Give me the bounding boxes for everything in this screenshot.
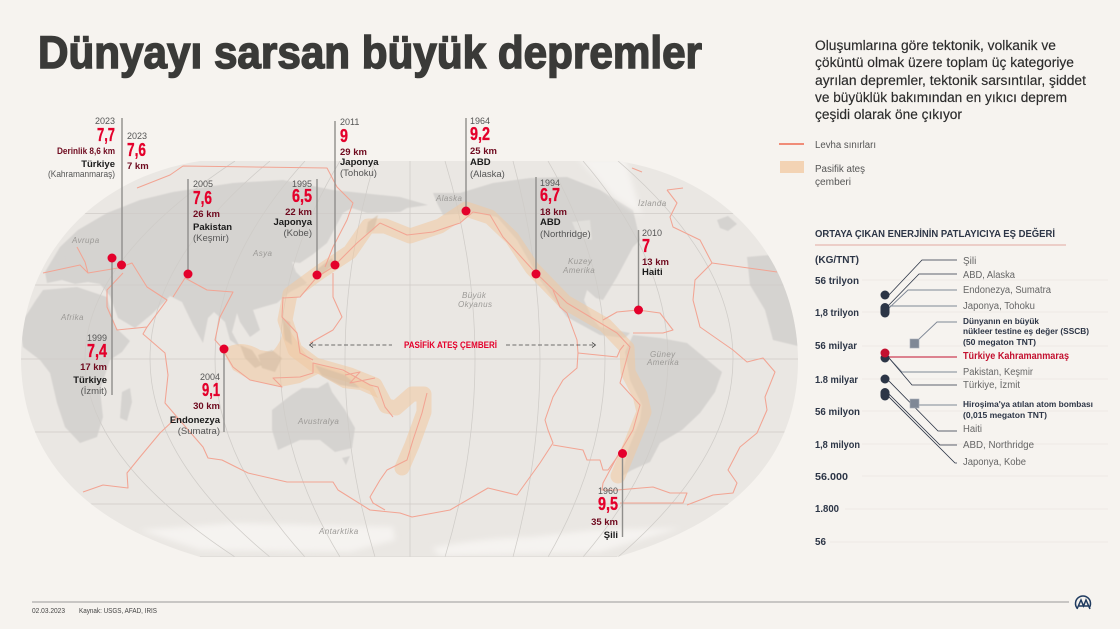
event: Şili: 35 km <box>591 517 618 528</box>
chart labels: Haiti <box>963 424 982 435</box>
event: Türkiye İzmit: (İzmit) <box>81 386 107 397</box>
event: Endonezya Sumatra: 9,1 <box>202 379 220 400</box>
event: ABD Alaska: (Alaska) <box>470 169 505 180</box>
intro text: çöküntü olmak üzere toplam üç kategoriye <box>815 55 1074 70</box>
map labels: Büyük <box>462 291 487 300</box>
chart labels: nükleer testine eş değer (SSCB) <box>963 326 1089 336</box>
legend: çemberi <box>815 177 851 188</box>
event: Şili: 9,5 <box>598 493 618 514</box>
comparison squares <box>910 339 919 408</box>
event: ABD Northridge: 1994 <box>540 178 560 188</box>
ice: Hudson Bay, Greenland and Antarctica <box>140 158 680 556</box>
ring of fire label and arrows <box>310 340 596 350</box>
axis labels: 56.000 <box>815 471 848 483</box>
axis labels: 1,8 trilyon <box>815 307 859 319</box>
map labels: Asya <box>252 249 273 258</box>
legend <box>779 140 876 188</box>
map labels: Avustralya <box>297 417 339 426</box>
axis labels: 1,8 milyon <box>815 439 860 451</box>
icon: agency logo <box>1076 596 1090 609</box>
Pacific Ring of Fire band <box>222 209 644 476</box>
event: Japonya Kobe: 22 km <box>285 207 312 218</box>
event: Türkiye 7,6: 7,6 <box>127 139 146 160</box>
event: Türkiye 7,6 <box>127 131 149 172</box>
footer: Kaynak: USGS, AFAD, IRIS <box>79 608 157 615</box>
chart labels <box>963 256 1093 468</box>
event: Türkiye Kahramanmaraş 7,7: Türkiye <box>81 159 115 170</box>
intro text: çeşidi olarak öne çıkıyor <box>815 107 962 122</box>
event: Şili <box>591 449 627 541</box>
chart labels: Şili <box>963 256 976 267</box>
event: ABD Alaska: 9,2 <box>470 123 490 144</box>
event: Endonezya Sumatra: 2004 <box>200 372 220 382</box>
event: Pakistan Keşmir: (Keşmir) <box>193 233 229 244</box>
axis labels <box>815 254 860 548</box>
event: ABD Alaska: ABD <box>470 157 491 168</box>
event: Haiti <box>634 228 669 314</box>
event: Türkiye İzmit: 7,4 <box>87 340 108 361</box>
event: Haiti: Haiti <box>642 267 663 278</box>
event: Japonya Kobe: Japonya <box>273 217 313 228</box>
title: Dünyayı sarsan büyük depremler <box>38 27 702 78</box>
axis labels: 1.8 milyar <box>815 374 858 386</box>
intro text <box>815 38 1086 122</box>
chart labels: Endonezya, Sumatra <box>963 285 1051 296</box>
event: Japonya Tohoku: (Tohoku) <box>340 168 377 179</box>
intro text: Oluşumlarına göre tektonik, volkanik ve <box>815 38 1056 53</box>
chart labels: Dünyanın en büyük <box>963 316 1039 326</box>
event: Endonezya Sumatra <box>170 344 228 437</box>
event: Türkiye 7,6: 7 km <box>127 161 149 172</box>
event: Pakistan Keşmir: 26 km <box>193 209 220 220</box>
event: Japonya Tohoku: 2011 <box>340 117 359 127</box>
axis labels: (KG/TNT) <box>815 254 859 266</box>
event: ABD Northridge: (Northridge) <box>540 229 591 240</box>
event: Pakistan Keşmir: 2005 <box>193 179 213 189</box>
event: Türkiye Kahramanmaraş 7,7: 7,7 <box>97 124 115 145</box>
event: Pakistan Keşmir: 7,6 <box>193 187 212 208</box>
event: Türkiye Kahramanmaraş 7,7: Derinlik 8,6 km <box>57 146 115 157</box>
event: Endonezya Sumatra: 30 km <box>193 401 220 412</box>
map labels: İzlanda <box>638 199 667 208</box>
chart labels: (50 megaton TNT) <box>963 337 1036 347</box>
chart labels: Hiroşima'ya atılan atom bombası <box>963 399 1093 409</box>
event: ABD Northridge: 18 km <box>540 207 567 218</box>
event: Haiti: 2010 <box>642 228 662 238</box>
axis labels: 1.800 <box>815 503 839 515</box>
map labels: Antarktika <box>318 527 359 536</box>
legend: Levha sınırları <box>815 140 876 151</box>
continents <box>20 177 802 476</box>
leader lines <box>888 260 957 463</box>
intro text: ve büyüklük bakımından en yıkıcı deprem <box>815 90 1067 105</box>
axis labels: 56 milyar <box>815 340 857 352</box>
event: Türkiye İzmit: Türkiye <box>73 375 107 386</box>
event: Japonya Kobe: 1995 <box>292 179 312 189</box>
map labels: Alaska <box>435 194 463 203</box>
event: Türkiye Kahramanmaraş 7,7 <box>48 116 126 270</box>
event: Japonya Kobe: 6,5 <box>292 185 312 206</box>
map labels: Okyanus <box>458 300 492 309</box>
event: Japonya Tohoku <box>330 117 379 270</box>
map labels: Avrupa <box>71 236 100 245</box>
footer: 02.03.2023 <box>32 608 65 615</box>
chart labels: ABD, Alaska <box>963 270 1015 281</box>
event: Japonya Kobe <box>273 179 322 280</box>
map labels <box>60 194 679 536</box>
event: Türkiye İzmit <box>73 254 116 397</box>
event: Japonya Tohoku: 9 <box>340 125 348 146</box>
energy chart <box>815 227 1108 548</box>
map labels: Güney <box>650 350 676 359</box>
event: Türkiye İzmit: 17 km <box>80 362 107 373</box>
chart heading: ORTAYA ÇIKAN ENERJİNİN PATLAYICIYA EŞ DEĞERİ <box>815 227 1055 240</box>
earthquake markers <box>880 290 890 400</box>
event: Türkiye Kahramanmaraş 7,7: 2023 <box>95 116 115 126</box>
event: Haiti: 7 <box>642 235 650 256</box>
map labels: Afrika <box>60 313 84 322</box>
legend: Pasifik ateş <box>815 164 865 175</box>
event: Türkiye 7,6: 2023 <box>127 131 147 141</box>
intro text: ayrılan depremler, tektonik sarsıntılar, şiddet <box>815 73 1086 88</box>
chart labels: Japonya, Kobe <box>963 457 1026 468</box>
chart labels: Pakistan, Keşmir <box>963 367 1034 378</box>
graticule <box>0 161 820 557</box>
event: Şili: 1960 <box>598 486 618 496</box>
chart labels: Türkiye Kahramanmaraş <box>963 351 1069 362</box>
event: Japonya Kobe: (Kobe) <box>283 228 312 239</box>
event: Haiti: 13 km <box>642 257 669 268</box>
plate boundaries <box>43 166 777 517</box>
event: Şili: Şili <box>604 530 618 541</box>
map labels: Kuzey <box>568 257 593 266</box>
event: Türkiye İzmit: 1999 <box>87 333 107 343</box>
chart labels: Türkiye, İzmit <box>963 378 1020 391</box>
event: Endonezya Sumatra: (Sumatra) <box>178 426 220 437</box>
footer <box>32 602 1069 615</box>
ring of fire label and arrows: PASİFİK ATEŞ ÇEMBERİ <box>404 340 497 350</box>
event: ABD Northridge: 6,7 <box>540 184 560 205</box>
map labels: Amerika <box>646 358 679 367</box>
event: ABD Alaska: 25 km <box>470 146 497 157</box>
chart labels: (0,015 megaton TNT) <box>963 410 1047 420</box>
event: Pakistan Keşmir: Pakistan <box>193 222 232 233</box>
chart labels: Japonya, Tohoku <box>963 301 1035 312</box>
axis labels: 56 milyon <box>815 406 860 418</box>
islands in the ring <box>240 215 378 388</box>
event: ABD Alaska: 1964 <box>470 116 490 126</box>
axis labels: 56 <box>815 536 826 548</box>
chart labels: ABD, Northridge <box>963 440 1034 451</box>
axis labels: 56 trilyon <box>815 275 859 287</box>
world map <box>21 161 798 557</box>
map labels: Amerika <box>562 266 595 275</box>
event: Pakistan Keşmir <box>184 179 232 278</box>
event: Japonya Tohoku: Japonya <box>340 157 379 168</box>
event: ABD Alaska <box>462 116 505 216</box>
event: Japonya Tohoku: 29 km <box>340 147 367 158</box>
event: ABD Northridge <box>532 177 591 278</box>
event: Türkiye Kahramanmaraş 7,7: (Kahramanmaraş) <box>48 169 115 180</box>
event: Endonezya Sumatra: Endonezya <box>170 415 221 426</box>
event: ABD Northridge: ABD <box>540 217 561 228</box>
